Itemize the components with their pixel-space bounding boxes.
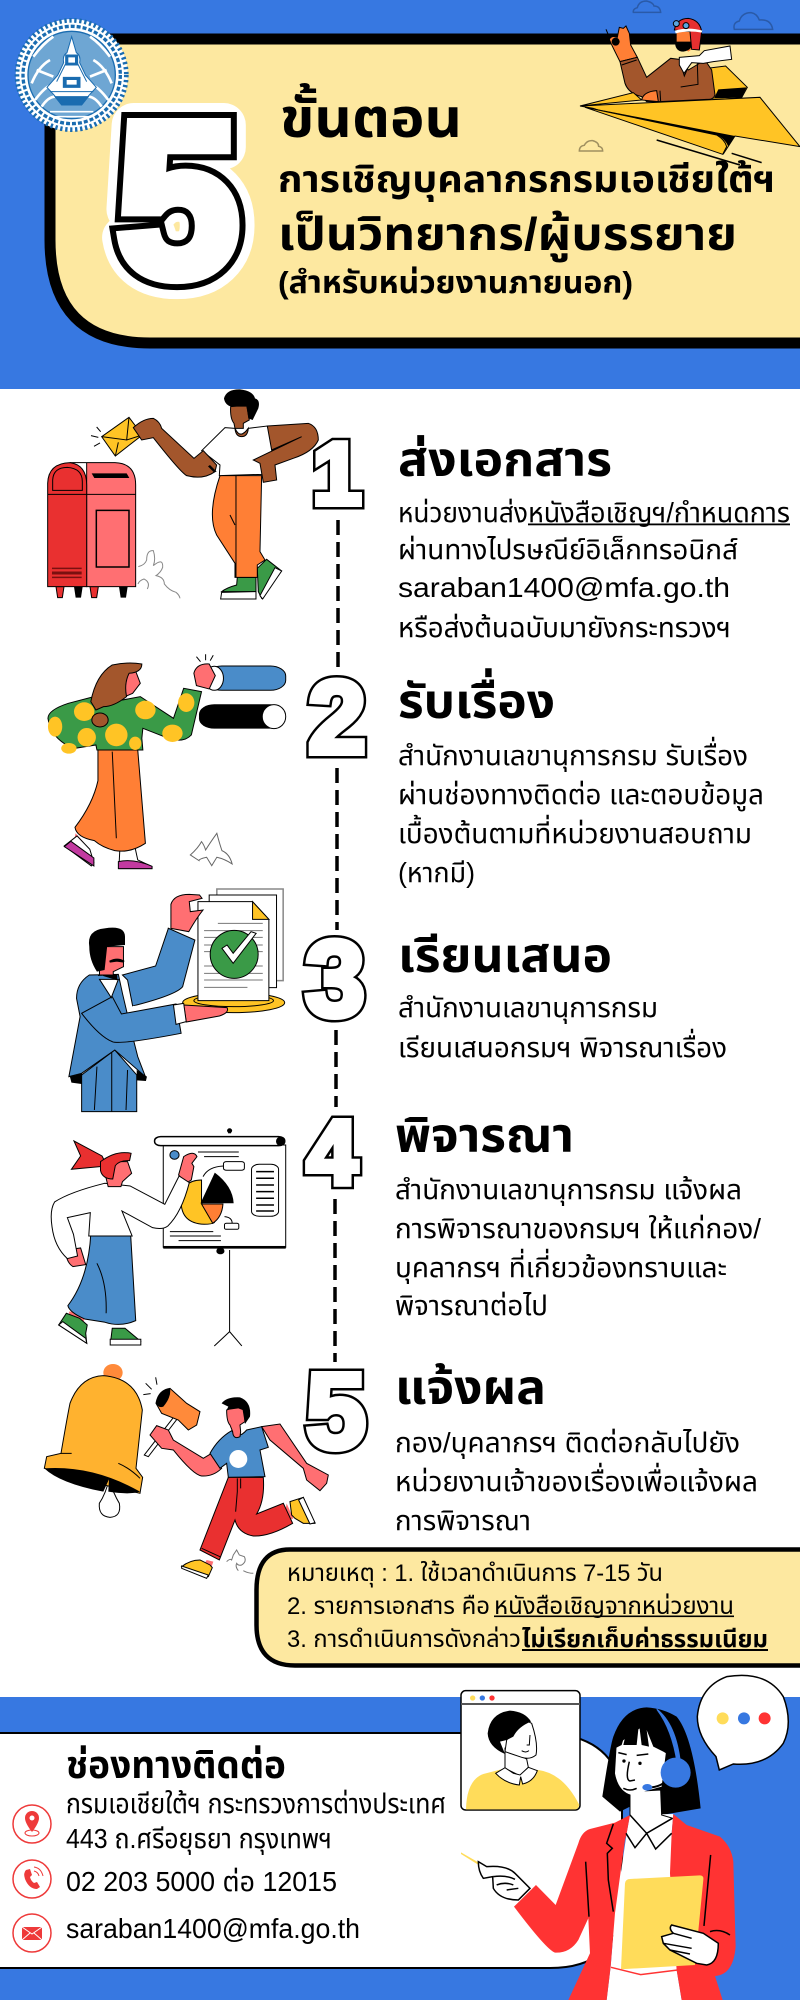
body text: การพิจารณาของกรมฯ ให้แก่กอง/ bbox=[395, 1213, 761, 1244]
body text: สำนักงานเลขานุการกรม bbox=[398, 992, 658, 1024]
callout: remarks: หมายเหตุ : 1. ใช้เวลาดำเนินการ 7-15 วัน bbox=[287, 1560, 663, 1588]
body text bbox=[398, 497, 790, 643]
icon: location pin bbox=[13, 1805, 51, 1843]
step 3 bbox=[69, 889, 727, 1112]
callout: remarks: 2. รายการเอกสาร คือ bbox=[287, 1593, 490, 1620]
speech bubble bbox=[697, 1675, 788, 1770]
number 4: 4 bbox=[307, 1103, 358, 1204]
number 4: 4 bbox=[307, 1103, 358, 1204]
heading: แจ้งผล bbox=[395, 1362, 546, 1415]
number 2: 2 bbox=[308, 660, 366, 776]
illustration: video call and support agent bbox=[461, 1675, 788, 2000]
timeline dashed line bbox=[335, 520, 338, 1362]
contact heading: ช่องทางติดต่อ bbox=[66, 1745, 286, 1787]
number 5: 5 bbox=[306, 1350, 366, 1471]
body text: พิจารณาต่อไป bbox=[395, 1290, 548, 1321]
illustration: woman with switches bbox=[48, 654, 286, 869]
body text: saraban1400@mfa.go.th bbox=[398, 572, 730, 603]
title: เป็นวิทยากร/ผู้บรรยาย bbox=[278, 208, 737, 262]
number 3: 3 bbox=[305, 918, 365, 1039]
contact address: กรมเอเชียใต้ฯ กระทรวงการต่างประเทศ bbox=[66, 1788, 446, 1819]
callout: remarks: 3. การดำเนินการดังกล่าว bbox=[287, 1625, 521, 1653]
heading: รับเรื่อง bbox=[398, 668, 555, 729]
body text: หรือส่งต้นฉบับมายังกระทรวงฯ bbox=[398, 612, 731, 643]
body text: สำนักงานเลขานุการกรม แจ้งผล bbox=[395, 1174, 742, 1206]
illustration: mailbox and person bbox=[48, 389, 318, 599]
header card bbox=[50, 39, 800, 343]
title: ขั้นตอน bbox=[280, 83, 462, 149]
callout: remarks bbox=[256, 1550, 800, 1666]
step 2 bbox=[48, 654, 764, 888]
video call window bbox=[461, 1691, 580, 1810]
heading: ส่งเอกสาร bbox=[398, 434, 612, 487]
body text: สำนักงานเลขานุการกรม รับเรื่อง bbox=[398, 736, 748, 772]
body text: ผ่านทางไปรษณีย์อิเล็กทรอนิกส์ bbox=[398, 534, 738, 565]
icon: phone bbox=[13, 1860, 51, 1898]
contact phone: 02 203 5000 ต่อ 12015 bbox=[66, 1866, 337, 1897]
callout: remarks: ไม่เรียกเก็บค่าธรรมเนียม bbox=[522, 1625, 768, 1653]
body text: (หากมี) bbox=[398, 857, 475, 888]
body text: กอง/บุคลากรฯ ติดต่อกลับไปยัง bbox=[395, 1427, 740, 1459]
illustration: presenter with chart board bbox=[51, 1128, 286, 1346]
body text: ผ่านช่องทางติดต่อ และตอบข้อมูล bbox=[398, 779, 764, 812]
agent bbox=[461, 1707, 736, 2000]
body text: หน่วยงานเจ้าของเรื่องเพื่อแจ้งผล bbox=[395, 1462, 758, 1497]
big number 5: 5 bbox=[117, 79, 239, 322]
body text: หน่วยงานส่ง bbox=[398, 497, 528, 528]
heading: พิจารณา bbox=[395, 1110, 574, 1163]
number 2: 2 bbox=[308, 660, 366, 776]
big number 5: 5 bbox=[117, 79, 239, 322]
step 5 bbox=[44, 1350, 758, 1578]
body text: หนังสือเชิญฯ/กำหนดการ bbox=[528, 497, 790, 528]
title bbox=[278, 83, 775, 300]
contact address: 443 ถ.ศรีอยุธยา กรุงเทพฯ bbox=[66, 1823, 332, 1855]
step 1 bbox=[48, 389, 790, 643]
title: (สำหรับหน่วยงานภายนอก) bbox=[278, 265, 633, 300]
body text: เบื้องต้นตามที่หน่วยงานสอบถาม bbox=[398, 814, 752, 849]
callout: remarks: หนังสือเชิญจากหน่วยงาน bbox=[494, 1592, 734, 1620]
illustration: man presenting document bbox=[69, 889, 285, 1112]
panel: header bbox=[0, 0, 800, 389]
contact email: saraban1400@mfa.go.th bbox=[66, 1913, 360, 1944]
body text bbox=[395, 1174, 761, 1321]
panel: contact footer bbox=[0, 1675, 800, 2000]
icon: envelope bbox=[13, 1914, 51, 1952]
number 5: 5 bbox=[306, 1350, 366, 1471]
body text: บุคลากรฯ ที่เกี่ยวข้องทราบและ bbox=[395, 1248, 727, 1284]
contact card bbox=[0, 1733, 622, 1968]
illustration: bell and running man bbox=[44, 1364, 328, 1578]
title: การเชิญบุคลากรกรมเอเชียใต้ฯ bbox=[278, 159, 775, 202]
number 1: 1 bbox=[313, 424, 361, 523]
number 3: 3 bbox=[305, 918, 365, 1039]
icon: pilot on paper plane bbox=[579, 1, 800, 165]
contact address bbox=[66, 1788, 446, 1855]
body text bbox=[395, 1427, 758, 1536]
body text bbox=[398, 992, 727, 1063]
body text bbox=[398, 736, 764, 888]
big number 5: 5 bbox=[117, 79, 239, 322]
icon: ministry seal bbox=[16, 19, 128, 131]
number 1: 1 bbox=[313, 424, 361, 523]
body text: เรียนเสนอกรมฯ พิจารณาเรื่อง bbox=[398, 1028, 727, 1063]
step 4 bbox=[51, 1103, 761, 1346]
heading: เรียนเสนอ bbox=[398, 930, 612, 983]
body text: การพิจารณา bbox=[395, 1505, 531, 1536]
